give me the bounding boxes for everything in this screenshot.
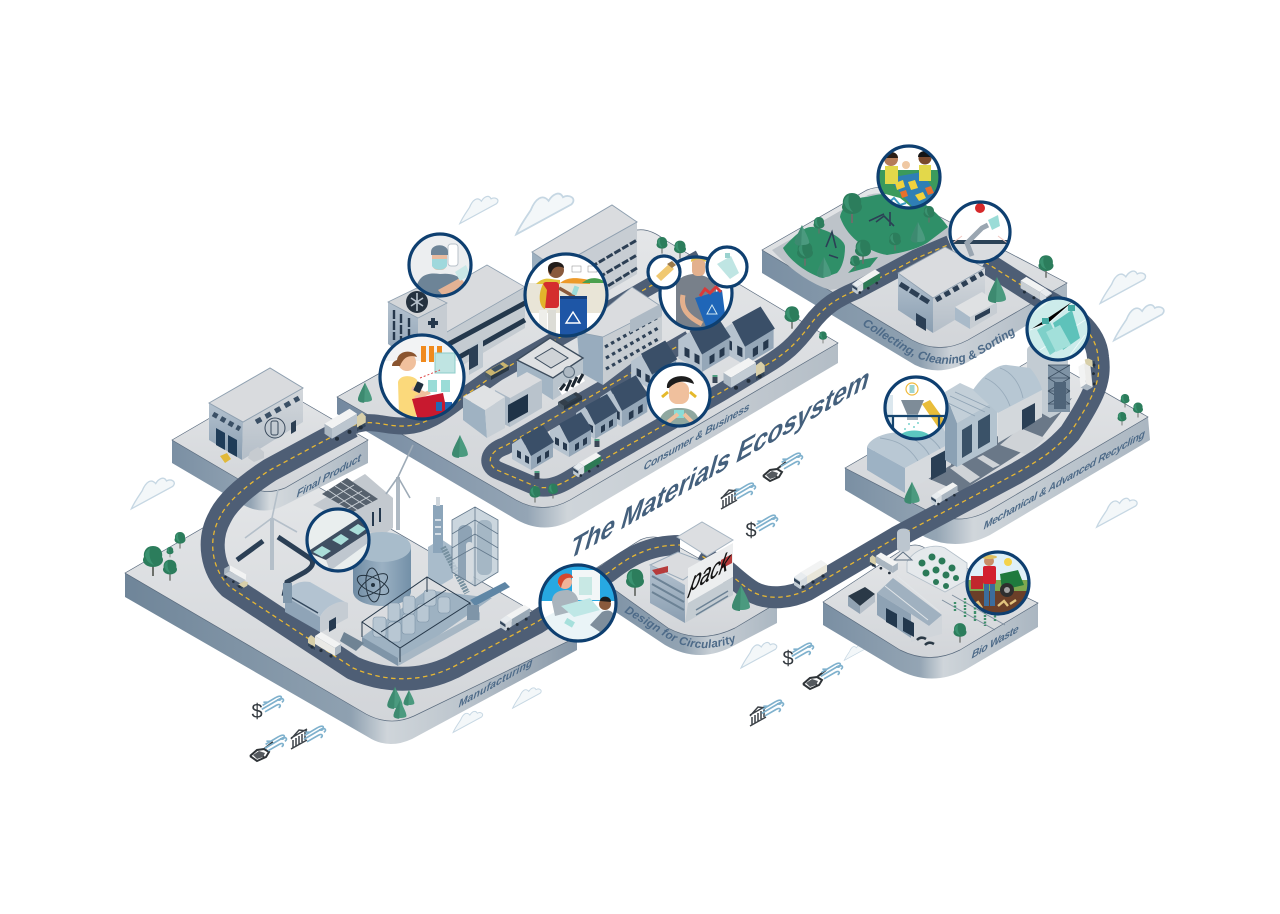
icon group: finance, policy and partnership near bio waste (750, 643, 843, 726)
circle: community waste sorting (878, 146, 940, 210)
building: final product warehouse (209, 368, 303, 463)
circle: robotic sorting arm (950, 202, 1010, 264)
label: bio waste: Bio Waste (970, 621, 1021, 662)
factory: hangar (283, 582, 348, 633)
factory: distillation tower and scaffold (428, 497, 498, 593)
icon group: finance, policy and partnership near manufacturing: $ (251, 701, 263, 723)
panel: collecting, cleaning and sorting platform (762, 187, 1067, 370)
circle: farmer with tractor (967, 552, 1029, 615)
road network (213, 244, 1099, 679)
circle: hopper and pellets (885, 377, 948, 442)
building: sorting facility (898, 247, 1052, 333)
trees (143, 237, 1143, 719)
label: final product: Final Product (295, 450, 363, 501)
sign: pack: pack (687, 544, 734, 598)
circle: surgeon (409, 234, 471, 300)
icon group: finance, policy and partnership under title: $ (745, 520, 757, 542)
circle: shopper scanning code (380, 335, 470, 421)
building: storefront (517, 338, 585, 400)
panel: mechanical and advanced recycling platform (845, 355, 1150, 544)
park lawns with trees and playground (783, 193, 948, 278)
building: upper office (532, 205, 637, 322)
recycling plant apron (927, 398, 1072, 492)
panel: manufacturing platform (125, 474, 577, 744)
label: collecting, cleaning and sorting: Collecting, Cleaning & Sorting (864, 320, 1015, 365)
factory: process tank grid (340, 577, 510, 666)
building: small garage blocks (463, 372, 542, 438)
circle: designers at table (540, 565, 616, 642)
vehicles: consumer roads (485, 270, 880, 477)
panel: final product platform (172, 383, 368, 511)
circle: woman at recycling bin (525, 254, 610, 340)
panel: design for circularity platform (590, 537, 777, 655)
icon group: finance, policy and partnership under title (721, 453, 803, 542)
background clouds (131, 194, 1164, 732)
circle: girl with bottle (648, 364, 710, 430)
label: design for circularity: Design for Circularity (624, 606, 735, 648)
houses (512, 306, 775, 479)
building: pack headquarters (650, 522, 733, 623)
vehicles: manufacturing road (220, 409, 530, 658)
panel: bio waste platform (823, 545, 1038, 679)
label: consumer and business: Consumer & Business (642, 399, 752, 474)
factory: solar roof building (313, 474, 393, 537)
circle: recycled flakes bottles (1027, 298, 1089, 360)
label: mechanical and advanced recycling: Mechanical & Advanced Recycling (982, 426, 1147, 533)
building: hospital (388, 265, 525, 375)
icon group: finance, policy and partnership near manufacturing (250, 696, 326, 761)
icon group: finance, policy and partnership near bio waste: $ (782, 648, 794, 670)
factory: pipelines (237, 537, 313, 596)
wind turbines (245, 445, 413, 570)
factory: atom tank (353, 532, 411, 606)
panel: consumer and business platform (337, 230, 838, 528)
building: recycling silo and scaffold (1027, 342, 1070, 418)
heading: the materials ecosystem: The Materials Ecosystem (566, 359, 875, 567)
label: manufacturing: Manufacturing (457, 655, 534, 711)
circle: man carrying recycling bag (648, 247, 747, 335)
building: bio waste barn and greenhouse (794, 528, 1005, 645)
building: mid office (577, 287, 662, 385)
circle: conveyor with product (307, 509, 372, 571)
building: hangars of recycling plant (867, 356, 1104, 506)
